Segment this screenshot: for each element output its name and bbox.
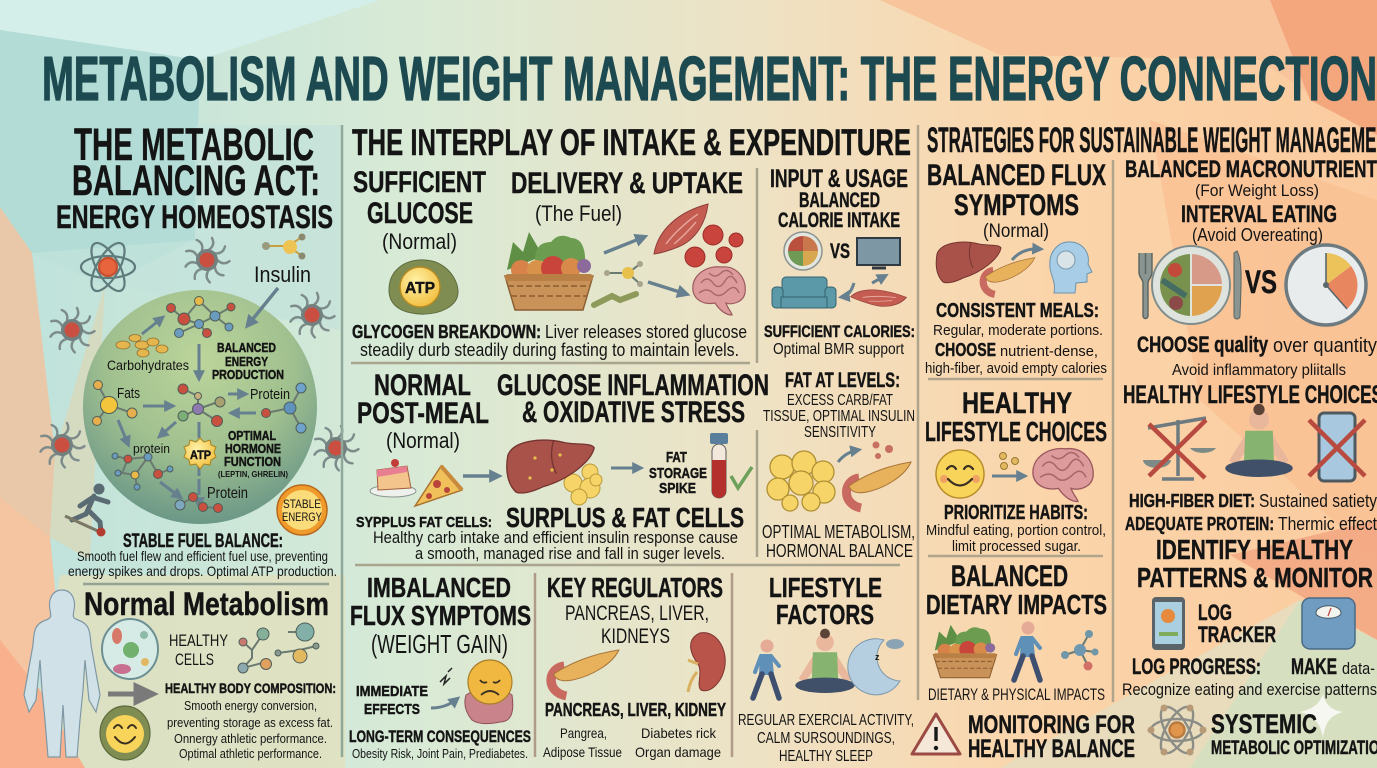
icon: plate: [784, 232, 822, 270]
heading: interplay: THE INTERPLAY OF INTAKE & EXPENDITURE: [352, 122, 911, 163]
heading: metabolic balancing act: BALANCING ACT:: [72, 157, 320, 205]
heading: balanced dietary: BALANCED: [951, 560, 1068, 593]
text: choose quality: [1137, 332, 1377, 379]
heading: delivery and uptake: [511, 167, 743, 226]
arrow: liver to spike: [611, 466, 640, 470]
heading: key regulators: KIDNEYS: [601, 625, 670, 648]
panel: normal metabolism: [24, 586, 336, 761]
text: surplus fat cells: a smooth, managed rise and fall in suger levels.: [415, 544, 725, 563]
label: healthy cells: HEALTHY: [169, 631, 228, 650]
icon: pancreas: [551, 650, 619, 696]
text: lifestyle list: HEALTHY SLEEP: [779, 748, 873, 765]
sphere labels: (LEPTIN, GHRELIN): [218, 469, 288, 479]
panel: identify healthy patterns: [1122, 534, 1377, 699]
panel: healthy lifestyle choices right: [1123, 381, 1377, 534]
heading: normal metabolism: Normal Metabolism: [84, 586, 329, 622]
text: sufficient calories: SUFFICIENT CALORIES:: [764, 322, 915, 341]
icon: fat cells on liver: [564, 464, 602, 505]
text: systemic: [1211, 709, 1377, 759]
text: optimal metabolism: [762, 522, 915, 561]
panel: monitoring: [912, 711, 1135, 763]
label: log tracker: TRACKER: [1198, 622, 1276, 647]
icon: walker: [1014, 622, 1040, 680]
sphere labels: [107, 340, 290, 502]
label: healthy cells: [169, 631, 228, 669]
heading: imbalanced flux: FLUX SYMPTOMS: [350, 600, 531, 631]
protein chain left: [112, 453, 173, 490]
icon: head with brain: [1050, 242, 1092, 293]
panel: key regulators: [543, 572, 726, 760]
label: immediate effects: EFFECTS: [364, 701, 420, 718]
label: fat storage spike: SPIKE: [659, 480, 696, 497]
icon: divided plate: [1152, 246, 1230, 324]
text: fiber and protein: HIGH-FIBER DIET:: [1129, 491, 1255, 511]
heading: healthy lifestyle: HEALTHY: [962, 387, 1072, 420]
text: systemic: SYSTEMIC: [1211, 709, 1317, 739]
icon: insulin molecule: [262, 234, 306, 260]
heading: metabolic balancing act: ENERGY HOMEOSTASIS: [56, 199, 333, 235]
heading: fat at levels: FAT AT LEVELS:: [785, 369, 900, 392]
heading: sufficient glucose: [353, 166, 486, 254]
text: stable fuel balance: STABLE FUEL BALANCE:: [123, 531, 283, 552]
text: surplus fat cells: Healthy carb intake and efficient insulin response cause: [373, 528, 738, 547]
text: stable fuel balance: [68, 531, 337, 579]
icon: liver: [507, 440, 594, 493]
icon: meditator: [1225, 404, 1293, 477]
text: fiber and protein: ADEQUATE PROTEIN:: [1125, 514, 1274, 534]
arrow: food to brain: [648, 282, 686, 294]
panel: input and usage: [764, 165, 915, 358]
label: immediate effects: [356, 683, 428, 718]
text: sufficient calories: Optimal BMR support: [773, 341, 904, 358]
icon: blood cells: [685, 225, 743, 267]
icon: human body: [24, 590, 100, 757]
heading: delivery and uptake: (The Fuel): [535, 201, 622, 226]
text: long-term consequences: [349, 727, 531, 761]
text: monitoring: MONITORING FOR: [968, 711, 1135, 739]
panel: delivery and uptake: [352, 167, 747, 360]
icon: ATP cell: ATP: [405, 280, 435, 297]
icon: ATP burst: ATP: [190, 448, 211, 462]
text: consistent meals: [925, 300, 1107, 377]
icon: tracker phone: [1152, 597, 1185, 650]
text: healthy body composition: Optimal athletic performance.: [179, 747, 322, 761]
icon: healthy molecules: [238, 623, 319, 673]
arrows: sofa and muscle: [842, 276, 885, 297]
icon: clock: [1286, 245, 1366, 325]
sphere labels: BALANCED: [217, 340, 276, 355]
icon: ATP burst: [184, 438, 216, 469]
icon: crossed-out scale: [1143, 418, 1216, 479]
text: excess carb: [763, 392, 915, 441]
heading: glucose inflammation: [497, 369, 769, 429]
heading: balanced flux: (Normal): [983, 221, 1049, 242]
heading: sufficient glucose: SUFFICIENT: [353, 166, 486, 199]
arrow: body to cell: [108, 686, 153, 702]
sphere labels: ENERGY: [225, 354, 268, 369]
text: prioritize habits: Mindful eating, portion control,: [926, 522, 1106, 539]
icon: glucose molecule: [604, 261, 643, 287]
heading: lifestyle factors: LIFESTYLE: [769, 572, 882, 603]
text: pancreas details: Pangrea,: [560, 725, 607, 741]
text: consistent meals: nutrient-dense,: [1000, 343, 1098, 360]
badge: stable energy: ENERGY: [282, 510, 322, 524]
icon: fork: [1139, 253, 1152, 318]
text: stable fuel balance: Smooth fuel flew and efficient fuel use, preventing: [77, 548, 328, 564]
icon: walker: [753, 640, 779, 698]
text: vs: VS: [830, 240, 850, 263]
text: lifestyle list: [738, 712, 914, 765]
icon: warning triangle: [912, 714, 960, 754]
heading: balanced flux: BALANCED FLUX: [927, 159, 1106, 192]
text: pancreas details: Adipose Tissue: [543, 744, 622, 760]
icon: green strand: [594, 294, 636, 305]
text: fiber and protein: [1125, 491, 1377, 534]
central molecule: [178, 384, 225, 426]
heading: key regulators: [547, 572, 723, 648]
text: healthy body composition: preventing storage as excess fat.: [167, 716, 333, 730]
label: fat storage spike: [649, 449, 707, 497]
heading: identify patterns: [1137, 534, 1373, 593]
text: glycogen breakdown: [352, 322, 747, 360]
text: long-term consequences: Obesity Risk, Joint Pain, Prediabetes.: [352, 746, 528, 761]
text: surplus fat cells: SURPLUS & FAT CELLS: [506, 502, 744, 533]
heading: healthy lifestyle: LIFESTYLE CHOICES: [925, 416, 1107, 447]
text: excess carb: TISSUE, OPTIMAL INSULIN: [763, 408, 915, 425]
label: fat storage spike: FAT: [666, 449, 687, 466]
label: log tracker: [1198, 600, 1276, 647]
icon: weight scale: [1302, 598, 1355, 649]
panel: balanced macronutrient: [1125, 156, 1377, 379]
label: immediate effects: IMMEDIATE: [356, 683, 428, 700]
text: glycogen breakdown: Liver releases stored glucose: [545, 322, 747, 342]
metabolism sphere: [83, 288, 317, 524]
icon: meditator: [795, 629, 855, 693]
icon: small muscle: [851, 273, 906, 321]
icon: kidney: [688, 633, 725, 692]
sphere labels: HORMONE: [225, 441, 281, 456]
label: log tracker: LOG: [1198, 600, 1232, 625]
panel: fat at levels: [762, 369, 915, 561]
protein molecule right: [262, 383, 306, 433]
arrow: insulin into sphere: [248, 288, 278, 325]
arrow: organs to brain: [1012, 249, 1040, 260]
heading: input and usage: BALANCED: [799, 189, 880, 212]
text: glycogen breakdown: GLYCOGEN BREAKDOWN:: [352, 322, 541, 342]
heading: metabolic balancing act: THE METABOLIC: [74, 119, 314, 170]
heading: sufficient glucose: (Normal): [382, 229, 457, 254]
icon: basket: [933, 625, 997, 678]
text: pancreas liver kidney: PANCREAS, LIVER, KIDNEY: [545, 700, 726, 720]
text: kidney details: Diabetes rick: [641, 725, 717, 741]
heading: delivery and uptake: DELIVERY & UPTAKE: [511, 167, 743, 200]
heading: sufficient glucose: GLUCOSE: [367, 197, 473, 230]
text: choose quality: Avoid inflammatory pliitalls: [1172, 362, 1346, 379]
text: log progress: [1122, 654, 1377, 699]
panel: imbalanced flux symptoms: [349, 572, 531, 761]
text: kidney details: [635, 725, 721, 760]
heading: normal post-meal: (Normal): [386, 428, 460, 453]
panel: systemic optimization: [1148, 702, 1377, 759]
heading: imbalanced flux: [350, 572, 531, 659]
heading: macronutrient: (For Weight Loss): [1195, 181, 1319, 200]
sphere labels: Carbohydrates: [107, 357, 189, 373]
text: consistent meals: Regular, moderate portions.: [933, 322, 1103, 339]
icon: crossed-out phone: [1309, 413, 1365, 481]
text: healthy body composition: Onnergy athletic performance.: [174, 732, 327, 746]
label: fat storage spike: STORAGE: [649, 465, 707, 482]
fats molecule: [92, 380, 137, 426]
icon: healthy cell: [102, 619, 158, 679]
icon: moon and cloud: z: [875, 652, 880, 662]
icon: blood tube: [710, 433, 728, 498]
text: optimal metabolism: OPTIMAL METABOLISM,: [762, 522, 915, 542]
icon: dots: [1000, 452, 1018, 470]
icon: check mark: [731, 467, 752, 488]
sphere labels: FUNCTION: [224, 454, 281, 469]
heading: lifestyle factors: [769, 572, 882, 630]
badge: stable energy: [277, 485, 327, 535]
heading: imbalanced flux: (WEIGHT GAIN): [371, 629, 508, 659]
text: choose quality: CHOOSE quality: [1137, 332, 1269, 357]
badge: stable energy: STABLE: [283, 497, 321, 511]
label: insulin: Insulin: [254, 262, 311, 287]
icon: sparks: [440, 668, 452, 684]
heading: healthy lifestyle: [925, 387, 1107, 447]
icon: brain: [693, 267, 745, 315]
icon: pizza: [415, 466, 462, 506]
text: healthy body composition: Smooth energy conversion,: [184, 699, 317, 713]
icon: atom: [81, 238, 135, 296]
text: monitoring: [968, 711, 1135, 763]
heading: input and usage: CALORIE INTAKE: [778, 209, 900, 232]
text: log progress: MAKE: [1291, 654, 1337, 679]
icon: smiley: [936, 450, 984, 498]
text: consistent meals: CHOOSE: [935, 340, 996, 360]
panel: sufficient glucose: [353, 166, 486, 314]
text: excess carb: SENSITIVITY: [804, 424, 876, 441]
label: healthy cells: CELLS: [175, 650, 214, 669]
icon: liver: [936, 242, 1001, 283]
icon: ATP cell: [389, 260, 458, 314]
text: stable fuel balance: energy spikes and drops. Optimal ATP production.: [68, 563, 337, 579]
text: prioritize habits: [926, 502, 1106, 555]
protein chain bottom: [175, 492, 222, 512]
text: vs: VS: [1245, 264, 1277, 300]
text: pancreas details: [543, 725, 622, 760]
icon: muscle: [654, 204, 708, 254]
arrow: food to muscle: [604, 237, 644, 253]
heading: input and usage: INPUT & USAGE: [770, 165, 908, 193]
icon: brain: [1033, 449, 1093, 502]
heading: metabolic balancing act: [56, 119, 333, 235]
text: consistent meals: CONSISTENT MEALS:: [936, 300, 1099, 322]
icon: vegetable basket: [505, 232, 593, 310]
text: sufficient calories: [764, 322, 915, 358]
icon: small fat droplets: [872, 442, 893, 459]
text: surplus fat cells: SYPPLUS FAT CELLS:: [356, 514, 492, 531]
text: kidney details: Organ damage: [635, 744, 721, 760]
heading: balanced dietary: DIETARY IMPACTS: [926, 589, 1107, 620]
icon: atom: [1148, 702, 1206, 758]
icon: upset stomach face: [465, 660, 513, 724]
icon: fat cluster: [767, 451, 835, 511]
molecule network top: [166, 296, 235, 338]
arrow: cluster to pancreas: [838, 450, 858, 462]
panel: normal post-meal: [357, 369, 489, 506]
panel: glucose inflammation: [356, 369, 769, 563]
text: healthy body composition: HEALTHY BODY COMPOSITION:: [165, 680, 336, 696]
icon: sofa: [772, 277, 836, 308]
heading: macronutrient: (Avoid Overeating): [1192, 225, 1323, 245]
panel: metabolic balancing act: [40, 119, 359, 579]
panel: healthy lifestyle choices left: [925, 387, 1107, 555]
panel: lifestyle factors: [738, 572, 914, 765]
heading: macronutrient: [1125, 156, 1377, 245]
arrow: effects: [431, 699, 457, 708]
heading: key regulators: PANCREAS, LIVER,: [565, 602, 709, 625]
icon: runner: [65, 484, 108, 536]
panel: balanced flux symptoms: [925, 159, 1107, 377]
heading: balanced flux: SYMPTOMS: [954, 189, 1079, 222]
sphere labels: Protein: [207, 485, 248, 502]
text: prioritize habits: PRIORITIZE HABITS:: [944, 502, 1088, 524]
icon: cake: [370, 459, 416, 497]
text: healthy body composition: [165, 680, 336, 761]
heading: glucose inflammation: GLUCOSE INFLAMMATION: [497, 369, 769, 402]
text: lifestyle list: CALM SURSOUNDINGS,: [757, 730, 895, 747]
panel: balanced dietary impacts: [926, 560, 1107, 704]
heading: normal post-meal: NORMAL: [374, 369, 471, 402]
text: log progress: LOG PROGRESS:: [1132, 654, 1261, 679]
icon: television: [857, 238, 900, 268]
sphere labels: protein: [133, 441, 170, 456]
icon: virus particles: [40, 238, 359, 471]
heading: input and usage: [770, 165, 908, 232]
heading: glucose inflammation: & OXIDATIVE STRESS: [522, 396, 745, 429]
text: long-term consequences: LONG-TERM CONSEQUENCES: [349, 727, 531, 746]
text: consistent meals: high-fiber, avoid empty calories: [925, 360, 1107, 377]
text: prioritize habits: limit processed sugar.: [952, 538, 1081, 555]
arrow: meal to liver: [463, 474, 498, 478]
sphere labels: OPTIMAL: [228, 428, 276, 443]
text: surplus fat cells: [356, 502, 744, 563]
carbohydrate grains: [116, 334, 168, 357]
text: glycogen breakdown: steadily durb steadily during fasting to maintain levels.: [360, 340, 739, 360]
icon: moon and cloud: [848, 639, 904, 695]
heading: balanced dietary: [926, 560, 1107, 620]
arrow: face to brain: [992, 474, 1024, 478]
sphere labels: Protein: [250, 386, 290, 403]
sphere labels: Fats: [117, 385, 140, 402]
icon: pancreas: [983, 258, 1035, 294]
heading: balanced flux: [927, 159, 1106, 242]
text: monitoring: HEALTHY BALANCE: [968, 735, 1135, 763]
sphere labels: PRODUCTION: [212, 367, 284, 382]
heading: lifestyle factors: FACTORS: [776, 599, 874, 630]
icon: knife: [1234, 251, 1241, 319]
heading: key regulators: KEY REGULATORS: [547, 572, 723, 603]
text: lifestyle list: REGULAR EXERCIAL ACTIVITY,: [738, 712, 914, 729]
icon: molecule: [1061, 630, 1098, 670]
heading: normal post-meal: [357, 369, 489, 453]
heading: normal post-meal: POST-MEAL: [357, 397, 489, 430]
heading: imbalanced flux: IMBALANCED: [367, 572, 511, 603]
text: dietary physical impacts: DIETARY & PHYSICAL IMPACTS: [928, 685, 1105, 704]
text: optimal metabolism: HORMONAL BALANCE: [766, 541, 913, 561]
icon: pancreas: [846, 462, 911, 508]
text: excess carb: EXCESS CARB/FAT: [787, 392, 893, 409]
icon: happy cell: [100, 706, 150, 760]
arrows inside sphere: [118, 318, 256, 505]
